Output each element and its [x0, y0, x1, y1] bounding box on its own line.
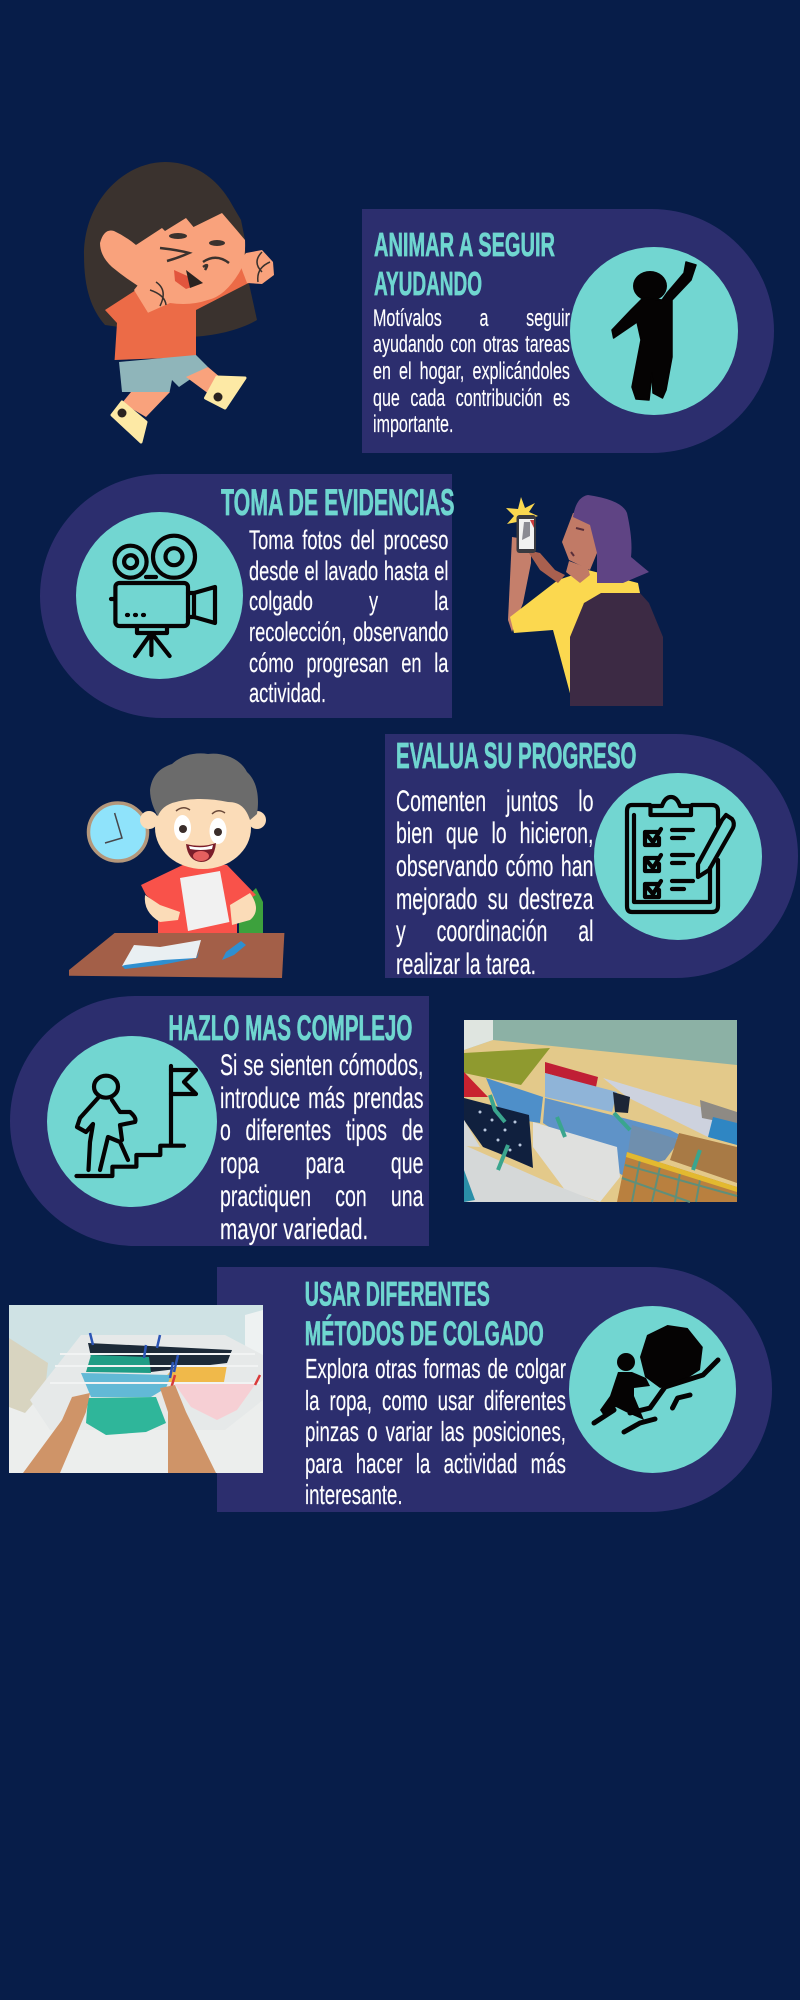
photo: hands hanging clothes on indoor drying rack — [9, 1305, 263, 1473]
text block: toma fotos: desde el lavado hasta el — [249, 556, 448, 586]
icon: film camera on tripod — [108, 534, 218, 658]
text block: explora otras formas: Explora otras formas de colgar — [305, 1353, 566, 1384]
text block: motívalos — [373, 305, 570, 438]
icon: figure pushing a boulder uphill — [592, 1325, 720, 1434]
circle: icon background — [570, 247, 738, 415]
text block: si se sienten cómodos: Si se sienten cómodos, — [220, 1049, 423, 1082]
photo: clothes hanging on lines outdoors — [464, 1020, 738, 1203]
illustration: happy jumping girl — [84, 162, 274, 444]
heading: toma de evidencias: TOMA DE EVIDENCIAS — [221, 482, 454, 523]
heading: hazlo mas complejo: HAZLO MAS COMPLEJO — [168, 1009, 412, 1048]
icon: person climbing stairs to a flag — [74, 1064, 198, 1178]
icon: clipboard checklist and pencil — [624, 794, 736, 914]
text block: explora otras formas — [305, 1353, 566, 1510]
panel: toma de evidencias — [40, 474, 452, 718]
circle: icon background — [46, 1036, 216, 1207]
text block: si se sienten cómodos: o diferentes tipos de — [220, 1114, 423, 1147]
text block: toma fotos — [249, 525, 448, 708]
text block: explora otras formas: la ropa, como usar diferentes — [305, 1385, 566, 1416]
text block: explora otras formas: interesante. — [305, 1479, 402, 1510]
text block: motívalos: en el hogar, explicándoles — [373, 358, 570, 385]
text block: si se sienten cómodos: ropa para que — [220, 1147, 423, 1180]
panel: animar a seguir ayudando — [362, 209, 774, 453]
icon: child silhouette reaching up — [611, 261, 697, 401]
text block: comenten juntos: bien que lo hicieron, — [396, 817, 593, 850]
text block: motívalos: Motívalos a seguir — [373, 305, 570, 332]
text block: comenten juntos — [396, 785, 594, 981]
heading: usar diferentes métodos de colgado — [305, 1276, 544, 1353]
panel: usar diferentes métodos de colgado — [217, 1267, 772, 1512]
circle: icon background — [569, 1306, 736, 1473]
heading: animar a seguir ayudando — [374, 226, 555, 302]
text block: explora otras formas: para hacer la actividad más — [305, 1448, 566, 1479]
illustration: boy reading a sheet at a desk with clock — [69, 753, 284, 978]
text block: comenten juntos: mejorado su destreza — [396, 883, 593, 916]
illustration: woman taking a photo with a phone — [506, 495, 663, 706]
heading: usar diferentes métodos de colgado: USAR DIFERENTES — [305, 1276, 490, 1314]
text block: si se sienten cómodos: introduce más prendas — [220, 1082, 423, 1115]
panel: hazlo mas complejo — [10, 996, 429, 1246]
heading: animar a seguir ayudando: ANIMAR A SEGUIR — [374, 226, 555, 263]
circle: icon background — [594, 773, 762, 940]
text block: explora otras formas: pinzas o variar las posiciones, — [305, 1416, 566, 1447]
text block: toma fotos: colgado y la — [249, 586, 448, 616]
text block: comenten juntos: Comenten juntos lo — [396, 785, 593, 818]
heading: animar a seguir ayudando: AYUDANDO — [374, 265, 482, 302]
text block: toma fotos: recolección, observando — [249, 617, 448, 647]
heading: usar diferentes métodos de colgado: MÉTODOS DE COLGADO — [305, 1315, 544, 1353]
text block: toma fotos: cómo progresan en la — [249, 648, 448, 678]
text block: motívalos: ayudando con otras tareas — [373, 331, 570, 358]
panel: evalua su progreso — [385, 734, 798, 978]
text block: comenten juntos: realizar la tarea. — [396, 948, 536, 981]
text block: toma fotos: Toma fotos del proceso — [249, 525, 448, 555]
text block: toma fotos: actividad. — [249, 678, 326, 708]
text block: motívalos: importante. — [373, 411, 453, 438]
text block: comenten juntos: y coordinación al — [396, 915, 593, 948]
circle: icon background — [76, 512, 242, 679]
text block: si se sienten cómodos: mayor variedad. — [220, 1213, 368, 1246]
text block: si se sienten cómodos: practiquen con una — [220, 1180, 423, 1213]
text block: comenten juntos: observando cómo han — [396, 850, 593, 883]
text block: si se sienten cómodos — [220, 1049, 424, 1246]
text block: motívalos: que cada contribución es — [373, 385, 570, 412]
